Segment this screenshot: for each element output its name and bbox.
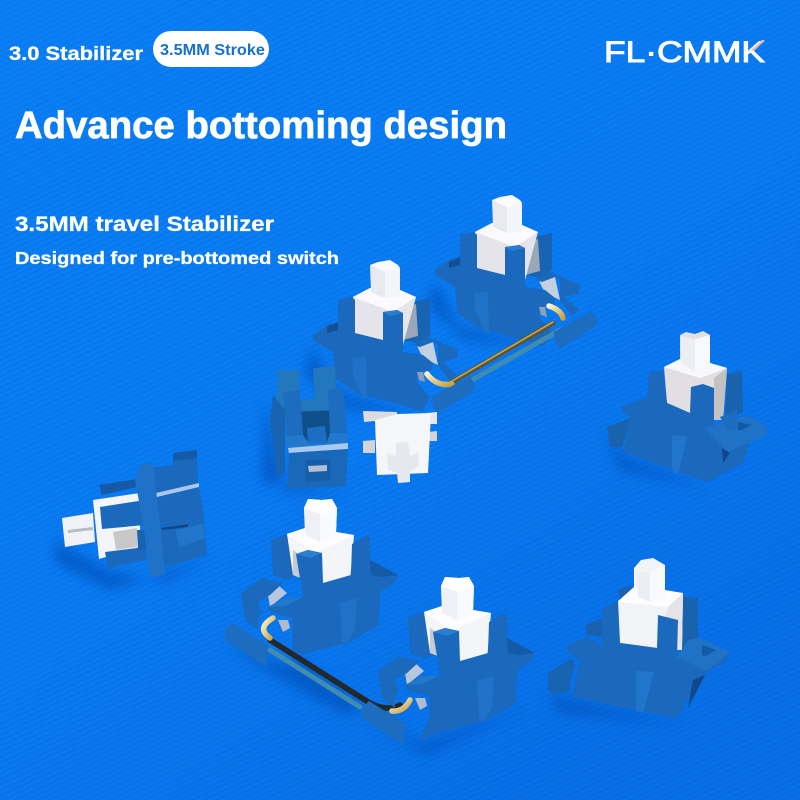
pill: 3.5MM Stroke: 3.5MM Stroke (160, 42, 265, 59)
steel wire (444, 322, 560, 396)
wire bends (264, 618, 410, 711)
subtitle: 3.5MM travel Stabilizer: 3.5MM travel Stabilizer (15, 213, 274, 236)
switch: bottom front (378, 577, 535, 740)
stabilizer pair: bottom (225, 499, 535, 745)
switch: top back (435, 195, 580, 346)
end cap: bottom left (225, 623, 268, 667)
text block: designed for pre-bottomed switch: Designed for pre-bottomed switch (15, 248, 339, 268)
end cap: front (432, 376, 475, 413)
wire bends (427, 306, 563, 385)
title: Advance bottoming design (15, 105, 507, 147)
end cap: back (554, 311, 597, 348)
switch: bottom left (241, 499, 398, 654)
switch: right (607, 331, 767, 482)
stabilizer pair: top (313, 195, 597, 413)
switch: top front (313, 260, 458, 411)
logo: FL-CMMK: FL·CMMK (604, 36, 765, 69)
switch: bottom right (548, 558, 730, 718)
heading: 3.0 Stabilizer: 3.0 Stabilizer (9, 43, 143, 65)
switch: lying on its side (62, 450, 207, 577)
switch: white stem part (363, 411, 437, 483)
end cap: bottom right (362, 701, 405, 745)
switch: disassembled housing (270, 366, 348, 489)
pill: 3.5MM Stroke (153, 31, 269, 67)
steel wire (270, 640, 400, 708)
